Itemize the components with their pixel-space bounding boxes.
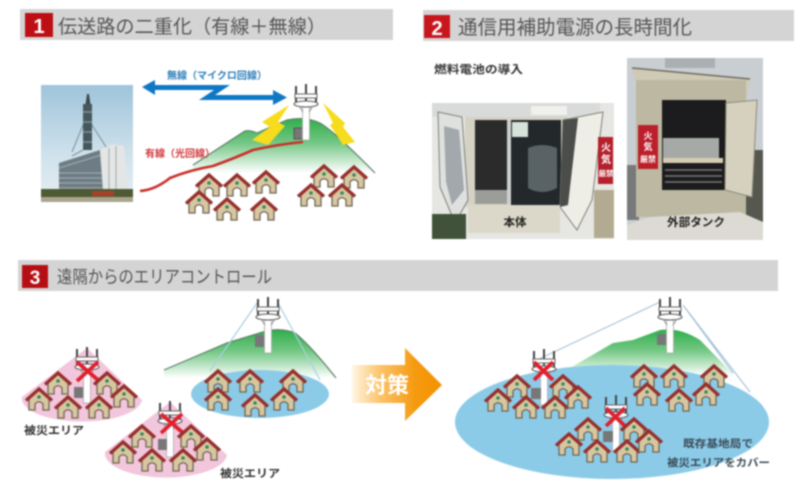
photo: fuel cell main unit: 気 — [601, 153, 611, 166]
header 1 — [20, 9, 393, 40]
icon: red X — [606, 408, 625, 426]
photo: external tank — [627, 58, 763, 240]
number badge 2: 2 — [431, 18, 443, 40]
arrow: countermeasure: 対策 — [365, 373, 409, 398]
line: wired fibre — [140, 142, 303, 191]
photo: external tank: 火 — [643, 131, 653, 141]
label: coverage note — [667, 437, 770, 469]
arrow: countermeasure — [352, 348, 442, 421]
label: coverage note: 既存基地局で — [683, 437, 753, 450]
label: damaged area 2: 被災エリア — [220, 466, 280, 480]
number badge 3: 3 — [30, 268, 40, 289]
header 2 — [423, 10, 794, 41]
icon: red X — [534, 362, 553, 380]
icon: lightning right — [323, 103, 355, 145]
icon: red X — [77, 362, 98, 381]
caption: external tank: 外部タンク — [667, 215, 725, 229]
photo: headquarters building with tower — [41, 85, 133, 202]
label: wired: 有線（光回線） — [145, 147, 215, 160]
photo: fuel cell main unit — [432, 103, 614, 239]
heading 1 text: 伝送路の二重化（有線＋無線） — [58, 16, 326, 38]
label: coverage note: 被災エリアをカバー — [667, 456, 770, 469]
houses, panel 1 — [186, 166, 367, 220]
mountain with tower, panel 1 — [193, 84, 375, 173]
coverage after — [455, 297, 769, 479]
icon: radio tower — [294, 84, 318, 140]
number badge 3 — [22, 265, 48, 289]
coverage before — [164, 297, 336, 418]
caption: main unit: 本体 — [504, 215, 527, 229]
header 3 — [18, 260, 778, 291]
label: damaged area 1: 被災エリア — [24, 423, 84, 437]
damaged area 2 — [105, 401, 227, 478]
number badge 1: 1 — [33, 16, 45, 38]
arrow: wireless link — [142, 80, 287, 105]
heading 2 text: 通信用補助電源の長時間化 — [458, 17, 692, 39]
icon: lightning left — [252, 105, 289, 145]
label: fuel cell: 燃料電池の導入 — [434, 62, 523, 76]
heading 3 text: 遠隔からのエリアコントロール — [57, 267, 272, 287]
photo: fuel cell main unit: 火 — [601, 142, 611, 154]
photo: external tank: 厳禁 — [640, 154, 656, 164]
damaged area 1 — [22, 347, 142, 422]
number badge 2 — [424, 15, 450, 40]
photo: external tank: 気 — [643, 141, 653, 152]
label: wireless: 無線（マイクロ回線） — [167, 69, 267, 82]
photo: fuel cell main unit: 厳禁 — [598, 168, 614, 178]
icon: red X — [161, 414, 182, 433]
number badge 1 — [25, 13, 53, 38]
